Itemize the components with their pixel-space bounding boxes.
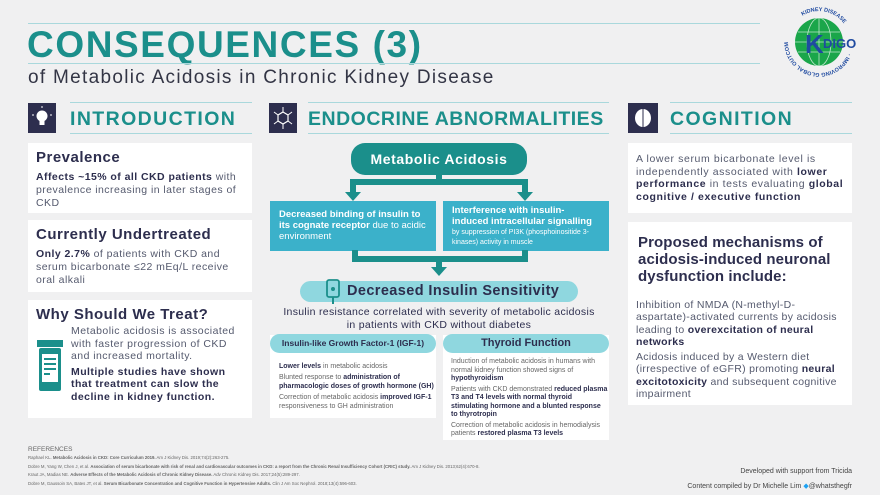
panel: IGF-1 [270, 335, 436, 418]
text: insulin resistance: Insulin resistance correlated with severity of metabolic acidosis in patients with CKD without diabetes [283, 306, 595, 330]
panel: proposed mechanisms: Proposed mechanisms of acidosis-induced neuronal dysfunction include: [638, 234, 831, 285]
box: interference: by suppression of PI3K (phosphoinositide 3-kinases) activity in muscle [452, 229, 589, 246]
box: decreased binding [270, 201, 436, 251]
credits: Content compiled by Dr Michelle Lim ◆@whatsthegfr [687, 483, 852, 490]
panel: why should we treat: Why Should We Treat? [36, 306, 208, 323]
logo: KDIGO: KIDNEY DISEASE [800, 7, 847, 24]
panel: IGF-1: Blunted response to administration of pharmacologic doses of growth hormone (GH) [279, 374, 434, 390]
heading: introduction [28, 102, 252, 134]
credits [687, 468, 852, 490]
panel: thyroid function: Correction of metabolic acidosis in hemodialysis patients restored plasma T3 levels [451, 422, 600, 437]
panel: prevalence: Prevalence [36, 149, 120, 166]
panel: cognition serum bicarbonate [628, 143, 852, 213]
title: CONSEQUENCES (3) [27, 24, 423, 65]
panel: thyroid function [443, 335, 609, 440]
heading: endocrine abnormalities [269, 102, 609, 134]
panel: cognition serum bicarbonate: A lower serum bicarbonate level is independently associated with lower performance in tests evaluating global cognitive / executive function [636, 153, 843, 202]
heading: introduction: INTRODUCTION [70, 108, 236, 130]
panel: why should we treat: Metabolic acidosis is associated with faster progression of CKD and increased mortality. [71, 325, 235, 362]
panel: why should we treat [28, 300, 252, 418]
heading: endocrine abnormalities: ENDOCRINE ABNORMALITIES [308, 108, 604, 130]
panel: thyroid function: Thyroid Function [481, 337, 571, 349]
heading: cognition: COGNITION [670, 108, 793, 130]
icon: lightbulb [28, 103, 56, 133]
icon: pill bottle [37, 340, 63, 391]
icon: insulin pen [326, 279, 340, 304]
arrows: split [345, 175, 533, 201]
panel: proposed mechanisms: Acidosis induced by a Western diet (irrespective of eGFR) promoting neural excitotoxicity and subsequent cognitive impairment [636, 351, 837, 400]
subtitle: of Metabolic Acidosis in Chronic Kidney Disease [28, 67, 495, 88]
panel: currently undertreated: Currently Undertreated [36, 226, 211, 243]
references: REFERENCES [28, 446, 72, 453]
credits: Developed with support from Tricida [740, 468, 852, 475]
references: Dobre M, Yang W, Chen J, et al. Association of serum bicarbonate with risk of renal and cardiovascular outcomes in CKD: a report from the Chronic Renal Insufficiency Cohort (CRIC) study. Am J Kidney Dis. 2013;62(4):670-8. [28, 464, 480, 469]
panel: prevalence [28, 143, 252, 213]
panel: why should we treat: Multiple studies have shown that treatment can slow the decline in kidney function. [71, 366, 226, 402]
references [28, 446, 480, 486]
panel: proposed mechanisms [628, 222, 852, 405]
panel: thyroid function: Induction of metabolic acidosis in humans with normal kidney function showed signs of hypothyroidism [451, 358, 595, 382]
panel: IGF-1: Lower levels in metabolic acidosis [279, 363, 388, 370]
references: Kraut JA, Madias NE. Adverse Effects of the Metabolic Acidosis of Chronic Kidney Disease. Adv Chronic Kidney Dis. 2017;24(5):289-297. [28, 472, 300, 477]
box: decreased binding: Decreased binding of insulin to its cognate receptor due to acidic environment [279, 209, 426, 242]
arrow: merge [352, 250, 528, 276]
box: interference: Interference with insulin-induced intracellular signalling [452, 205, 592, 227]
heading: cognition [628, 102, 852, 134]
panel: IGF-1: Insulin-like Growth Factor-1 (IGF-1) [282, 338, 424, 348]
pill: decreased insulin sensitivity: Decreased Insulin Sensitivity [347, 283, 559, 299]
panel: thyroid function: Patients with CKD demonstrated reduced plasma T3 and T4 levels with normal thyroid stimulating hormone and a blunted response to thyrotropin [451, 386, 607, 418]
icon: brain [628, 103, 658, 133]
references: Raphael KL. Metabolic Acidosis in CKD: Core Curriculum 2019. Am J Kidney Dis. 2019;74(2):263-275. [28, 455, 229, 460]
logo: KDIGO: DIGO [823, 36, 856, 51]
flowchart: metabolic acidosis: Metabolic Acidosis [370, 151, 508, 167]
box: interference [443, 201, 609, 251]
panel: proposed mechanisms: Inhibition of NMDA (N-methyl-D-aspartate)-activated currents by acidosis leading to overexcitation of neural networks [636, 299, 837, 348]
references: Dobre M, Gaussoin SA, Bates JT, et al. Serum Bicarbonate Concentration and Cognitive Function in Hypertensive Adults. Clin J Am Soc Nephrol. 2018;13(4):596-603. [28, 481, 357, 486]
panel: currently undertreated: Only 2.7% of patients with CKD and serum bicarbonate ≤22 mEq/L receive oral alkali [36, 248, 229, 286]
panel: currently undertreated [28, 220, 252, 292]
pill: decreased insulin sensitivity [300, 281, 578, 302]
panel: prevalence: Affects ~15% of all CKD patients with prevalence increasing in later stages of CKD [36, 171, 236, 209]
panel: IGF-1: Correction of metabolic acidosis improved IGF-1 responsiveness to GH administration [279, 394, 432, 410]
flowchart: metabolic acidosis [351, 143, 527, 175]
icon: molecule [269, 103, 297, 133]
logo: KDIGO: K [805, 29, 824, 59]
